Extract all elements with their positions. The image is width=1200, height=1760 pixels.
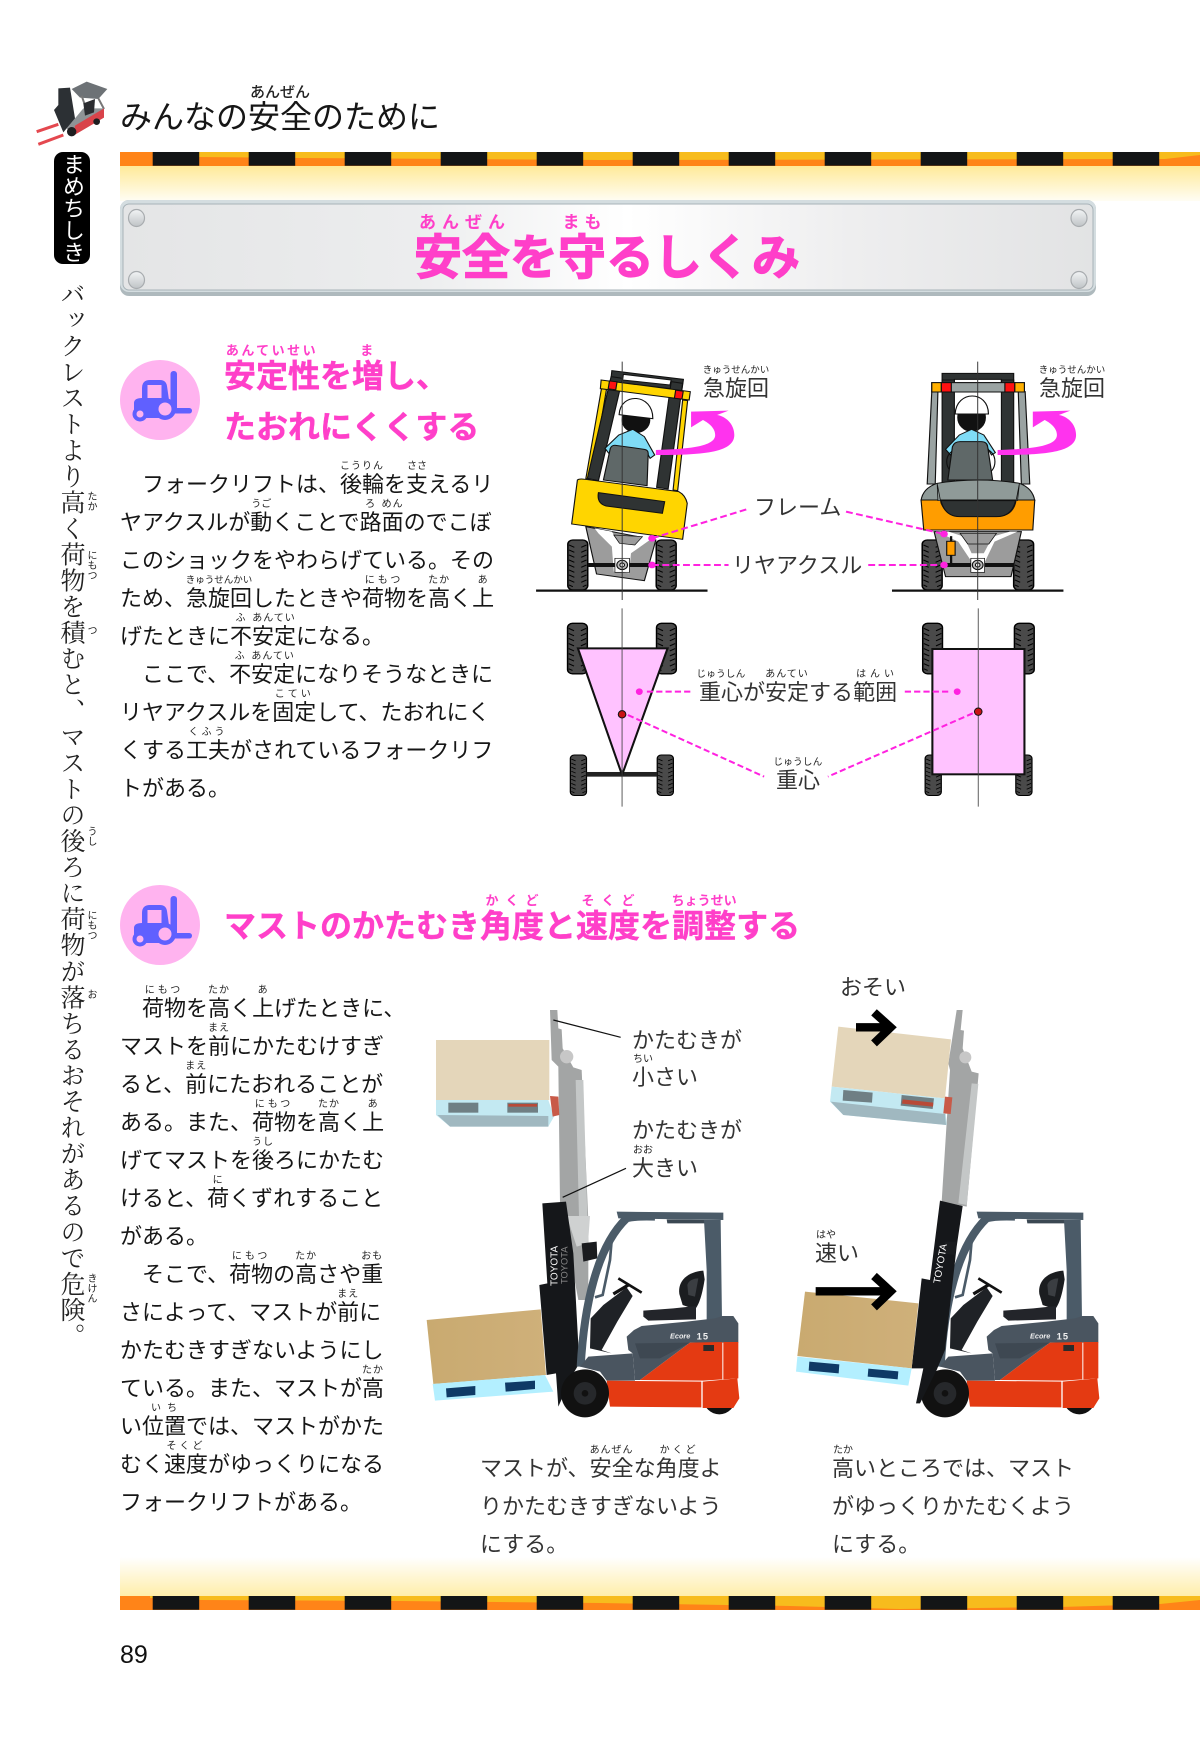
label: centre of gravity: 重心 [776,768,820,793]
main title: を るしくみ [510,232,800,285]
page: ると、 にたおれることが [120,1072,383,1097]
page: きい [654,1156,698,1181]
label: sharp turn right [1039,365,1105,401]
ground lines [536,587,1063,594]
page: ている。また、マストが [120,1376,362,1401]
page: 路 [360,510,382,535]
label: centre of gravity stable range: あんてい [765,669,809,680]
page: まえ [185,1061,207,1072]
icon: forklift badge 2 [120,885,200,965]
page: 高 [295,1262,317,1287]
page: あんぜん [419,213,511,232]
page: リヤアクスルを して、たおれにく [120,700,490,725]
page: くふう [189,727,228,738]
page: にもつ [145,985,183,996]
icon: forklift badge 1 [120,360,200,440]
left forklift tilted [568,371,690,590]
page: 工夫 [186,738,230,763]
side column text: たか [85,491,96,511]
page: たか [362,1365,384,1376]
page: かくど [660,1445,699,1456]
page: 前 [185,1072,207,1097]
page: あんぜん [250,84,310,101]
page: あんぜん [590,1445,634,1456]
model badge: Ecore [670,1332,690,1341]
left wheels [568,623,676,795]
arrow: slow [856,1012,891,1043]
page: あんてい [252,613,296,624]
page: たか [833,1445,853,1456]
page: おも [361,1251,383,1262]
page: 上 [252,996,274,1021]
page: たおれにくくする [224,409,479,445]
page: 支 [406,472,428,497]
rectangle stability range [932,649,1024,774]
label: sharp turn left: 急旋回 [703,376,769,401]
side column text: にもつ [85,910,96,940]
page: 重 [361,1262,383,1287]
turn arrows [656,411,1076,455]
model number: 15 [697,1331,709,1341]
page: まえ [208,1023,230,1034]
page: ささ [407,461,427,472]
page: たか [318,1099,340,1110]
page: 荷物 [252,1110,296,1135]
page: 高 [208,996,230,1021]
section 1 body text [120,460,494,801]
page: 速度 [164,1452,208,1477]
label: centre of gravity stable range: はんい [856,669,898,680]
mast [912,1201,963,1403]
page: がゆっくりかたむくよう [832,1494,1074,1519]
page: 面 [382,510,404,535]
page: ま [360,343,376,358]
right wheels [923,623,1034,795]
page: たか [295,1251,317,1262]
title plate [120,200,1096,296]
upper ghost mast [550,1010,590,1300]
page: かたむきすぎないようにし [120,1338,384,1363]
page: ふ [236,613,247,624]
header title: みんなの のために [120,99,440,135]
label: fast: い [837,1241,859,1266]
page: かたむきが [632,1028,742,1053]
center lines [622,362,978,600]
page: おお [633,1145,653,1156]
page: たか [208,985,230,996]
side column text: きけん [85,1273,96,1303]
mast [539,1202,597,1407]
page: トがある。 [120,776,230,801]
page: 増 [352,358,384,394]
label: fast: はや [816,1230,836,1241]
model badge: Ecore [1030,1332,1050,1341]
lower load [796,1292,918,1386]
diagram: top views, stability range [568,608,1034,807]
page: かたむきが [632,1118,742,1143]
diagram: rear views of forklifts [536,362,1076,600]
label: sharp turn left: きゅうせんかい [703,365,769,376]
page: きゅうせんかい [186,575,252,586]
page: 不 [230,624,252,649]
side column text: にもつ [85,550,96,580]
page: 位置 [142,1414,186,1439]
page: 前 [208,1034,230,1059]
side column text [57,281,98,1349]
label: sharp turn right: きゅうせんかい [1039,365,1105,376]
page number: 89 [120,1641,148,1669]
page: フォークリフトがある。 [120,1490,362,1515]
label: slow: おそい [840,975,906,1000]
main title: 安全 [414,232,510,285]
label: large tilt [632,1118,742,1181]
section heading 2: マストのかたむき と を する [224,908,800,944]
side label: mamechishiki: まめちしき [60,153,85,263]
mast label text: TOYOTA [932,1243,950,1285]
page: を し、 [320,358,448,394]
page: そくど [167,1441,206,1452]
upper ghost load [830,1027,952,1125]
page: 荷物 [362,586,406,611]
page: まえ [337,1289,359,1300]
page: 急旋回 [186,586,252,611]
mast label reflection text: TOYOTA [559,1246,569,1284]
label: centre of gravity stable range: 安定 [765,680,809,705]
page: いところでは、マスト [854,1456,1074,1481]
slow tilt mast and loads [796,1010,979,1403]
label: centre of gravity stable range [696,668,898,705]
photo: forklift with small mast tilt control [427,1010,739,1417]
side column text: お [85,989,96,999]
page: たか [428,575,450,586]
label: centre of gravity [773,757,823,793]
side label: mamechishiki [54,152,90,264]
page: 安定性 [224,358,320,394]
leader lines [553,1020,626,1197]
upper ghost mast [942,1010,979,1207]
page: さい [654,1065,698,1090]
header title: 安全 [248,99,312,135]
label: fast: 速 [815,1241,837,1266]
page: 後 [252,1148,274,1173]
label: sharp turn left [703,365,769,401]
page: 不 [229,662,251,687]
section heading 2: 速度 [576,908,640,944]
page: にもつ [365,575,403,586]
page: ある。また、 を く [120,1110,362,1135]
label: small tilt [632,1028,742,1090]
page: がある。 [120,1224,208,1249]
page: さによって、マストが に [120,1300,381,1325]
page: 上 [472,586,494,611]
page: 固定 [272,700,316,725]
page: げたときに になる。 [120,624,384,649]
page: あんてい [251,651,295,662]
page: くする がされているフォークリフ [120,738,493,763]
page: けると、 くずれすること [120,1186,383,1211]
page: ふ [235,651,246,662]
label: rear axle: リヤアクスル [732,553,862,578]
page: あ [368,1099,379,1110]
page: マストを にかたむけすぎ [120,1034,384,1059]
page: うご [251,499,271,510]
page: 大 [632,1156,654,1181]
side column text: うし [85,826,96,846]
label: centre of gravity: じゅうしん [773,757,823,768]
leaders and centre of gravity dots [618,688,982,777]
page: あ [478,575,489,586]
page: うし [252,1137,274,1148]
page: にもつ [232,1251,270,1262]
section heading 1 [224,343,479,445]
page: 角度 [656,1456,700,1481]
page: 荷 [207,1186,229,1211]
page: めん [382,499,404,510]
page: 高 [318,1110,340,1135]
main title: 守 [558,232,606,285]
page: むく がゆっくりになる [120,1452,384,1477]
page: そこで、 の さや [142,1262,361,1287]
page: あ [258,985,269,996]
caption left [480,1444,722,1557]
photo: forklift with slow tilt control [921,1212,1099,1417]
page: 上 [362,1110,384,1135]
icon: forklift at page header [37,82,107,144]
page: 安定 [252,624,296,649]
lower load [427,1309,553,1401]
page: ろ [365,499,376,510]
caption right [832,1444,1074,1557]
dashed leaders [648,509,948,568]
page: こてい [275,689,314,700]
page: ため、 したときや を く [120,586,472,611]
label: frame: フレーム [754,495,841,520]
right forklift level [921,373,1035,590]
bottom hazard band [120,1557,1200,1610]
page: こうりん [340,461,384,472]
page: 安全 [590,1456,634,1481]
arrow: fast [816,1276,891,1307]
page: 後輪 [340,472,384,497]
label: centre of gravity stable range: じゅうしん [696,669,746,680]
page: あんていせい [226,343,318,358]
label: fast [815,1230,859,1266]
label: centre of gravity stable range: 重心 [699,680,743,705]
page: にする。 [832,1532,920,1557]
page: 荷物 [142,996,186,1021]
mast label text: TOYOTA [549,1246,560,1286]
page: マストが、 な よ [480,1456,722,1481]
main title [414,213,800,285]
page: まも [563,213,607,232]
page: ヤアクスルが くことで のでこぼ [120,510,492,535]
page: を く げたときに、 [186,996,405,1021]
page: ちょうせい [672,893,737,908]
page: 前 [337,1300,359,1325]
page: ここで、 になりそうなときに [142,662,493,687]
page: 荷物 [229,1262,273,1287]
section heading 2: 調整 [672,908,736,944]
side column text: つ [85,625,96,635]
top hazard band [120,152,1200,201]
section 2 body text [120,984,405,1515]
page: 高 [362,1376,384,1401]
page: フォークリフトは、 を えるリ [142,472,493,497]
upper ghost load [436,1040,559,1127]
page: げてマストを ろにかたむ [120,1148,384,1173]
page: ちい [633,1054,653,1065]
page: いち [151,1403,183,1414]
page: にする。 [480,1532,568,1557]
triangle stability range [578,648,668,775]
page: そくど [582,893,642,908]
model number: 15 [1057,1331,1069,1341]
section heading 2: 角度 [480,908,544,944]
page: かくど [486,893,546,908]
page: 高 [428,586,450,611]
page: りかたむきすぎないよう [480,1494,722,1519]
page: このショックをやわらげている。その [120,548,494,573]
page: に [213,1175,224,1186]
page: い では、マストがかた [120,1414,384,1439]
page: 動 [250,510,272,535]
page: 高 [832,1456,854,1481]
page: にもつ [255,1099,293,1110]
label: centre of gravity stable range: が する [743,680,853,705]
label: centre of gravity stable range: 範囲 [853,680,897,705]
side column text: バックレストより高く荷物を積むと、マストの後ろに荷物が落ちるおそれがあるので危険。 [57,281,84,1349]
label: sharp turn right: 急旋回 [1039,376,1105,401]
page: 安定 [251,662,295,687]
page: 小 [632,1065,654,1090]
